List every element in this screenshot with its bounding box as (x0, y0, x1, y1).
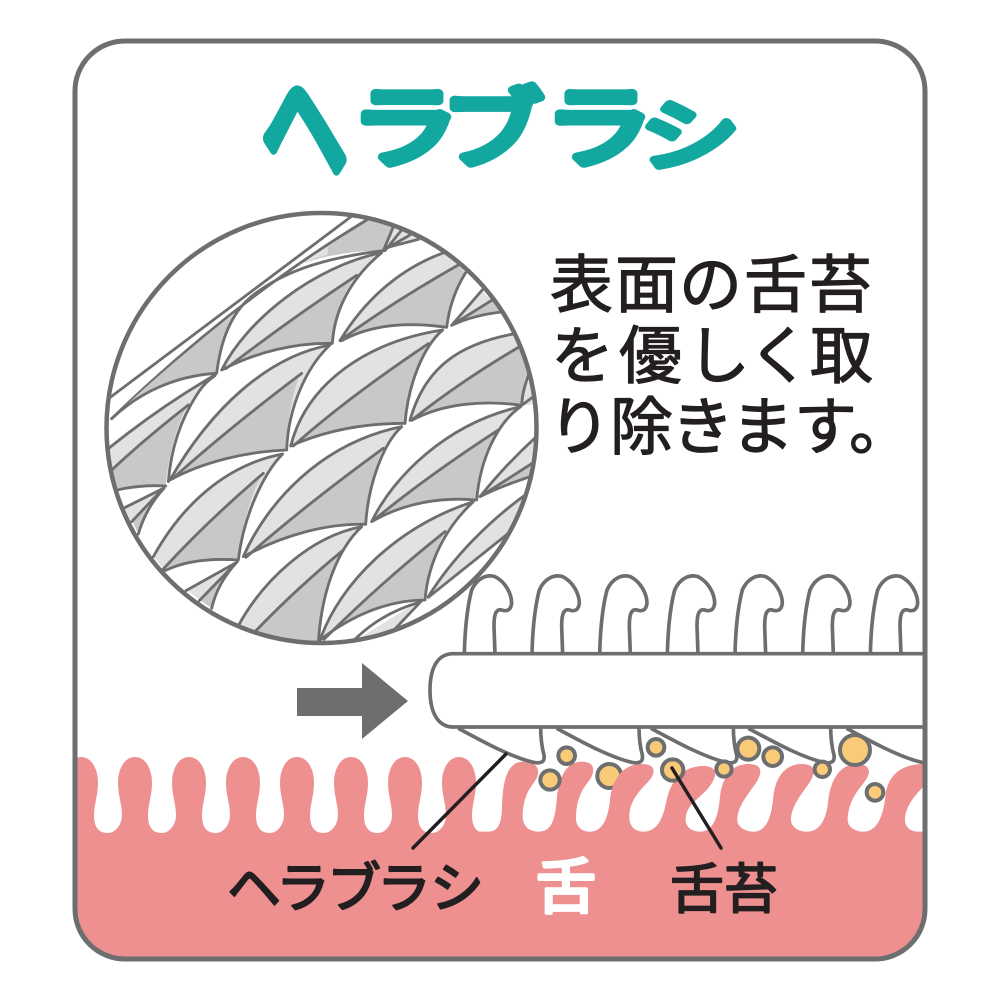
tongue: slanted papillae (479, 762, 922, 956)
brush head (430, 654, 940, 727)
scale 4 (110, 384, 204, 488)
title: ラ (545, 80, 653, 178)
label: brush: ヘラブラシ (227, 859, 484, 919)
body text (548, 251, 912, 463)
scale 8 (153, 454, 283, 571)
label: tongue: 舌 (536, 854, 596, 921)
top lines and wedge (107, 215, 353, 400)
scale 12 (322, 502, 473, 638)
body text: り除きます。 (548, 393, 912, 463)
spatula blades (458, 727, 933, 763)
tongue and brush illustration (54, 576, 940, 977)
scale 1 (128, 314, 234, 404)
title (262, 58, 740, 203)
scale 7 (412, 336, 533, 418)
scale 3 (346, 254, 465, 335)
arrow (297, 663, 408, 739)
small scale lower left (188, 568, 228, 599)
body text: 表面の舌苔 (550, 251, 872, 321)
tongue: upright papillae (78, 757, 480, 956)
tongue surface (78, 757, 922, 956)
lower right strip (434, 499, 522, 592)
title: ラ (351, 80, 459, 178)
bottom strip (361, 606, 414, 637)
brush (430, 576, 940, 763)
title: ヘ (262, 58, 347, 203)
scale 6 (291, 330, 443, 446)
scale 11 (240, 529, 357, 630)
small scale left (125, 494, 156, 521)
small scale right (487, 441, 534, 490)
scale 9 (243, 427, 402, 557)
leader line: plaque (672, 768, 721, 848)
title: ブ (442, 82, 544, 179)
leader line: brush (413, 754, 506, 848)
body text: を優しく取 (551, 322, 873, 392)
scale 5 (175, 348, 326, 474)
title: シ (640, 94, 740, 181)
magnified circle of brush surface (106, 213, 547, 643)
plaque behind papilla (597, 764, 621, 788)
tongue plaque (540, 735, 883, 801)
outer frame (75, 41, 925, 959)
small scale upper right (459, 292, 490, 319)
scale 2 (225, 256, 376, 366)
label: plaque: 舌苔 (670, 860, 778, 920)
scale 10 (376, 410, 514, 516)
bristles on top (464, 576, 918, 654)
